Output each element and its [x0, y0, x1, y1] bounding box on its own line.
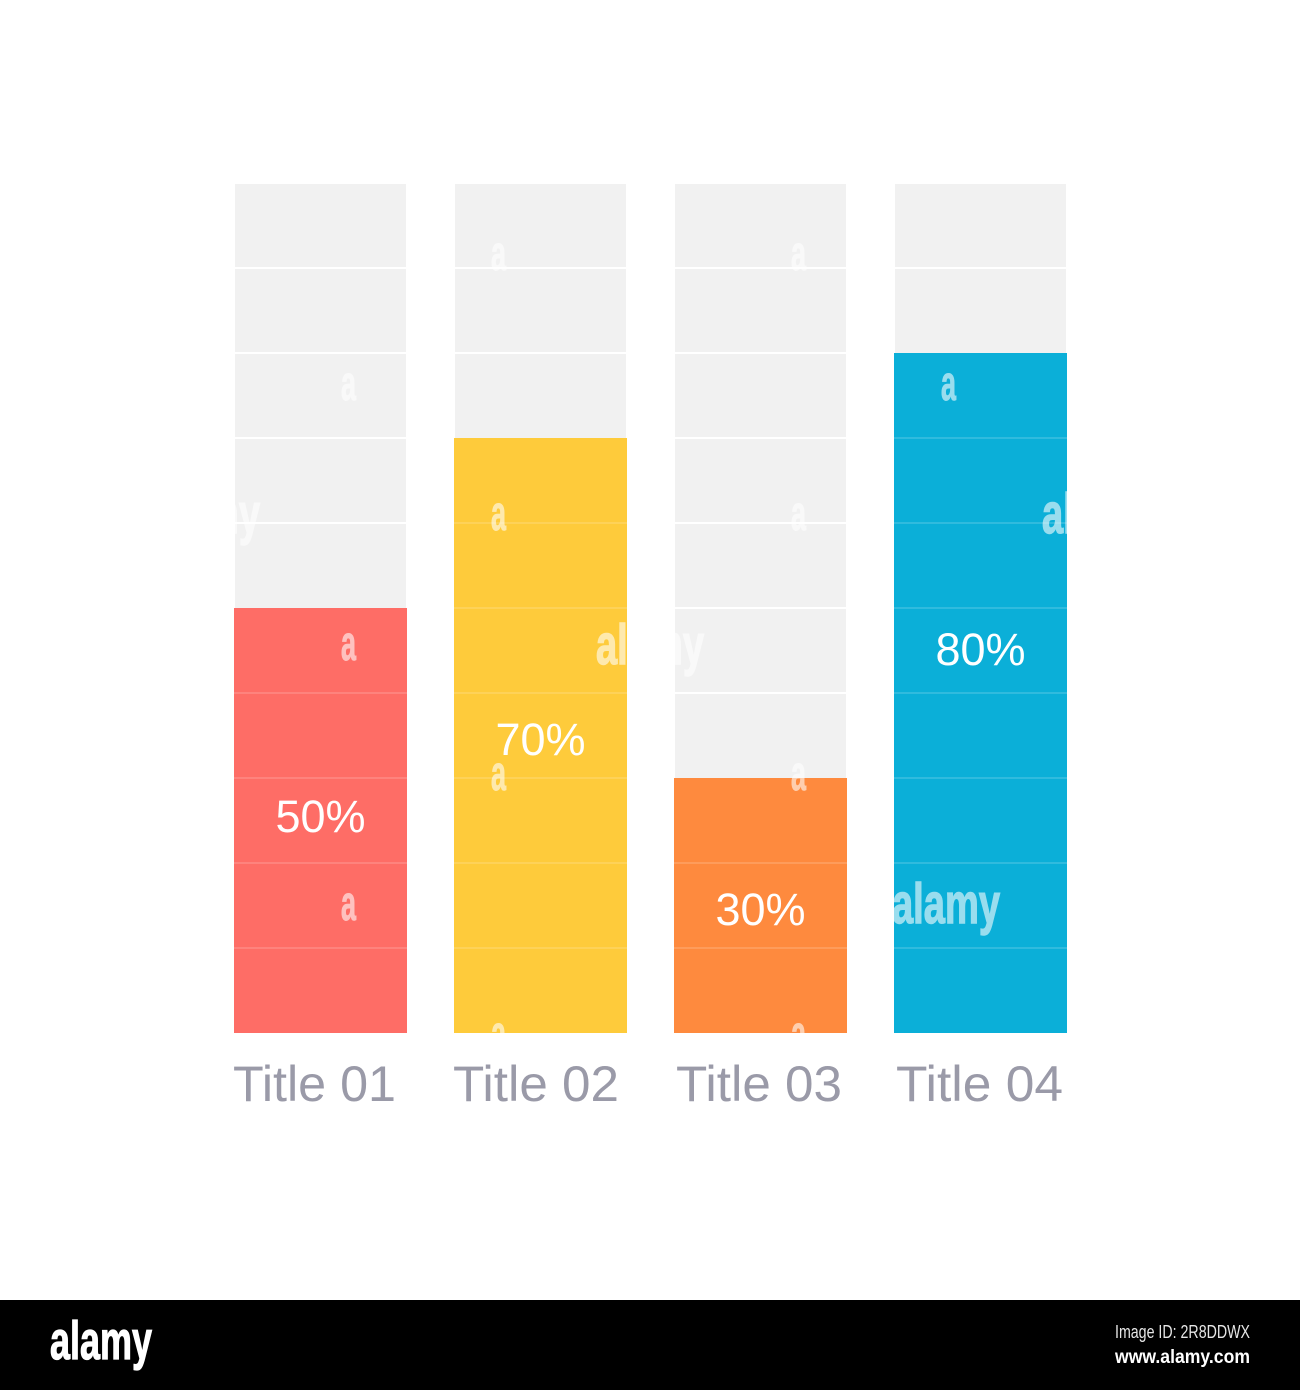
track: column 4 [895, 184, 1066, 353]
watermark overlay: alamy [152, 482, 260, 546]
label: Title 03: Title 03 [676, 1056, 842, 1112]
bar: 80% [894, 353, 1067, 1033]
watermark overlay: a [341, 357, 356, 411]
bar: 30% [674, 778, 847, 1033]
track: column 1 [235, 184, 406, 608]
watermark overlay: a [941, 357, 956, 411]
watermark overlay: alamy [892, 872, 1000, 936]
column: Title 02 [453, 184, 627, 1112]
footer bar [0, 1300, 1300, 1390]
footer logo: alamy [50, 1311, 152, 1371]
label: Title 04: Title 04 [896, 1056, 1063, 1112]
watermark overlay: a [791, 227, 806, 281]
track: column 3 [675, 184, 846, 778]
watermark overlay: a [791, 747, 806, 801]
column: Title 03 [674, 184, 847, 1112]
column: Title 01 [233, 184, 407, 1112]
bar: 50% [234, 608, 407, 1033]
label: Title 01: Title 01 [233, 1056, 396, 1112]
watermark overlay: a [791, 1007, 806, 1061]
value: 70%: 70% [495, 714, 586, 765]
column: Title 04 [894, 184, 1067, 1112]
watermark overlay: alamy [1042, 482, 1150, 546]
watermark overlay: a [491, 747, 506, 801]
value: 50%: 50% [275, 791, 366, 842]
value: 80%: 80% [935, 624, 1026, 675]
watermark overlay: a [491, 1007, 506, 1061]
image id: Image ID: 2R8DDWX [1115, 1322, 1250, 1342]
website: www.alamy.com [1114, 1347, 1250, 1368]
track: column 2 [455, 184, 626, 438]
watermark overlay: a [491, 227, 506, 281]
bar chart [233, 184, 1067, 1112]
bar: 70% [454, 438, 627, 1033]
watermark overlay: a [341, 877, 356, 931]
watermark overlay: a [341, 617, 356, 671]
watermark overlay: a [791, 487, 806, 541]
watermark overlay: alamy [596, 613, 704, 677]
watermark overlay: a [491, 487, 506, 541]
watermark overlay [152, 227, 1150, 1061]
label: Title 02: Title 02 [453, 1056, 619, 1112]
value: 30%: 30% [715, 884, 806, 935]
